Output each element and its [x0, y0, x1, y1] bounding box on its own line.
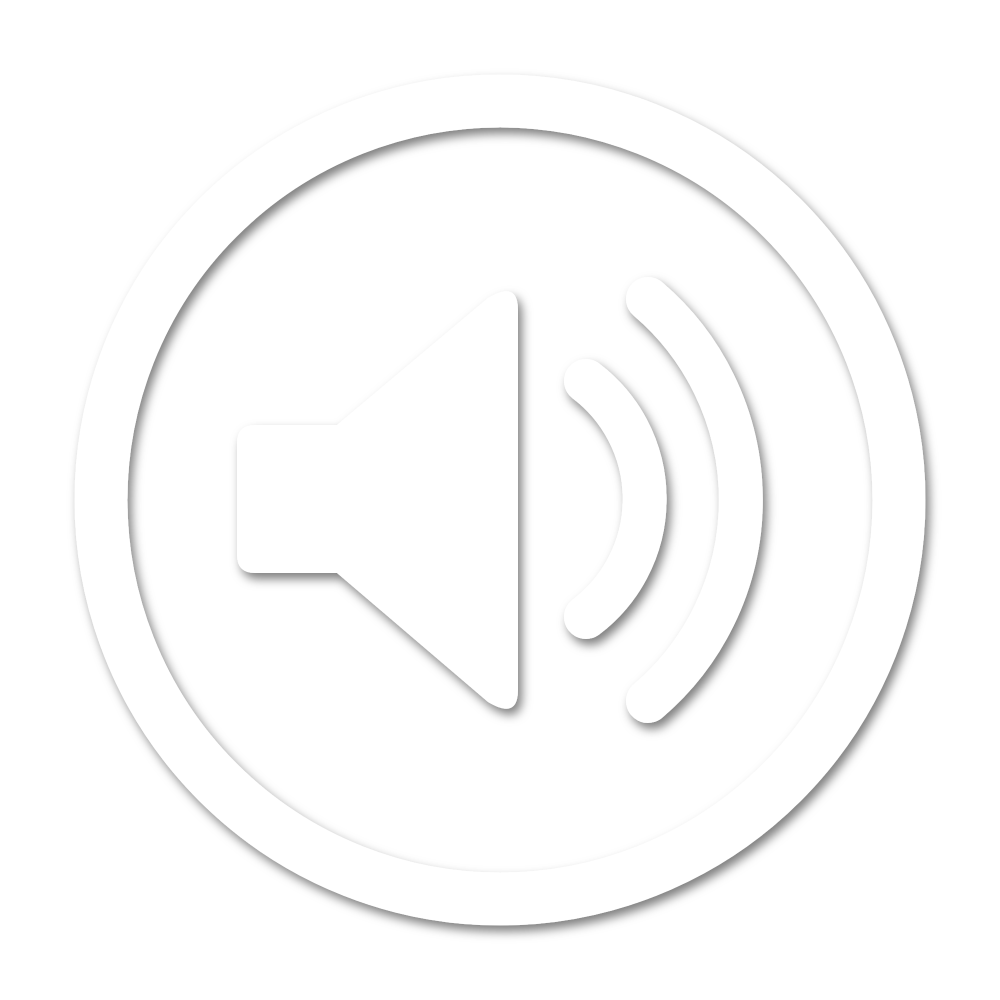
- icon: small sound wave: [586, 381, 645, 617]
- icon: large sound wave: [648, 299, 741, 701]
- icon: speaker body: [237, 291, 518, 709]
- icon: outer ring: [101, 101, 899, 899]
